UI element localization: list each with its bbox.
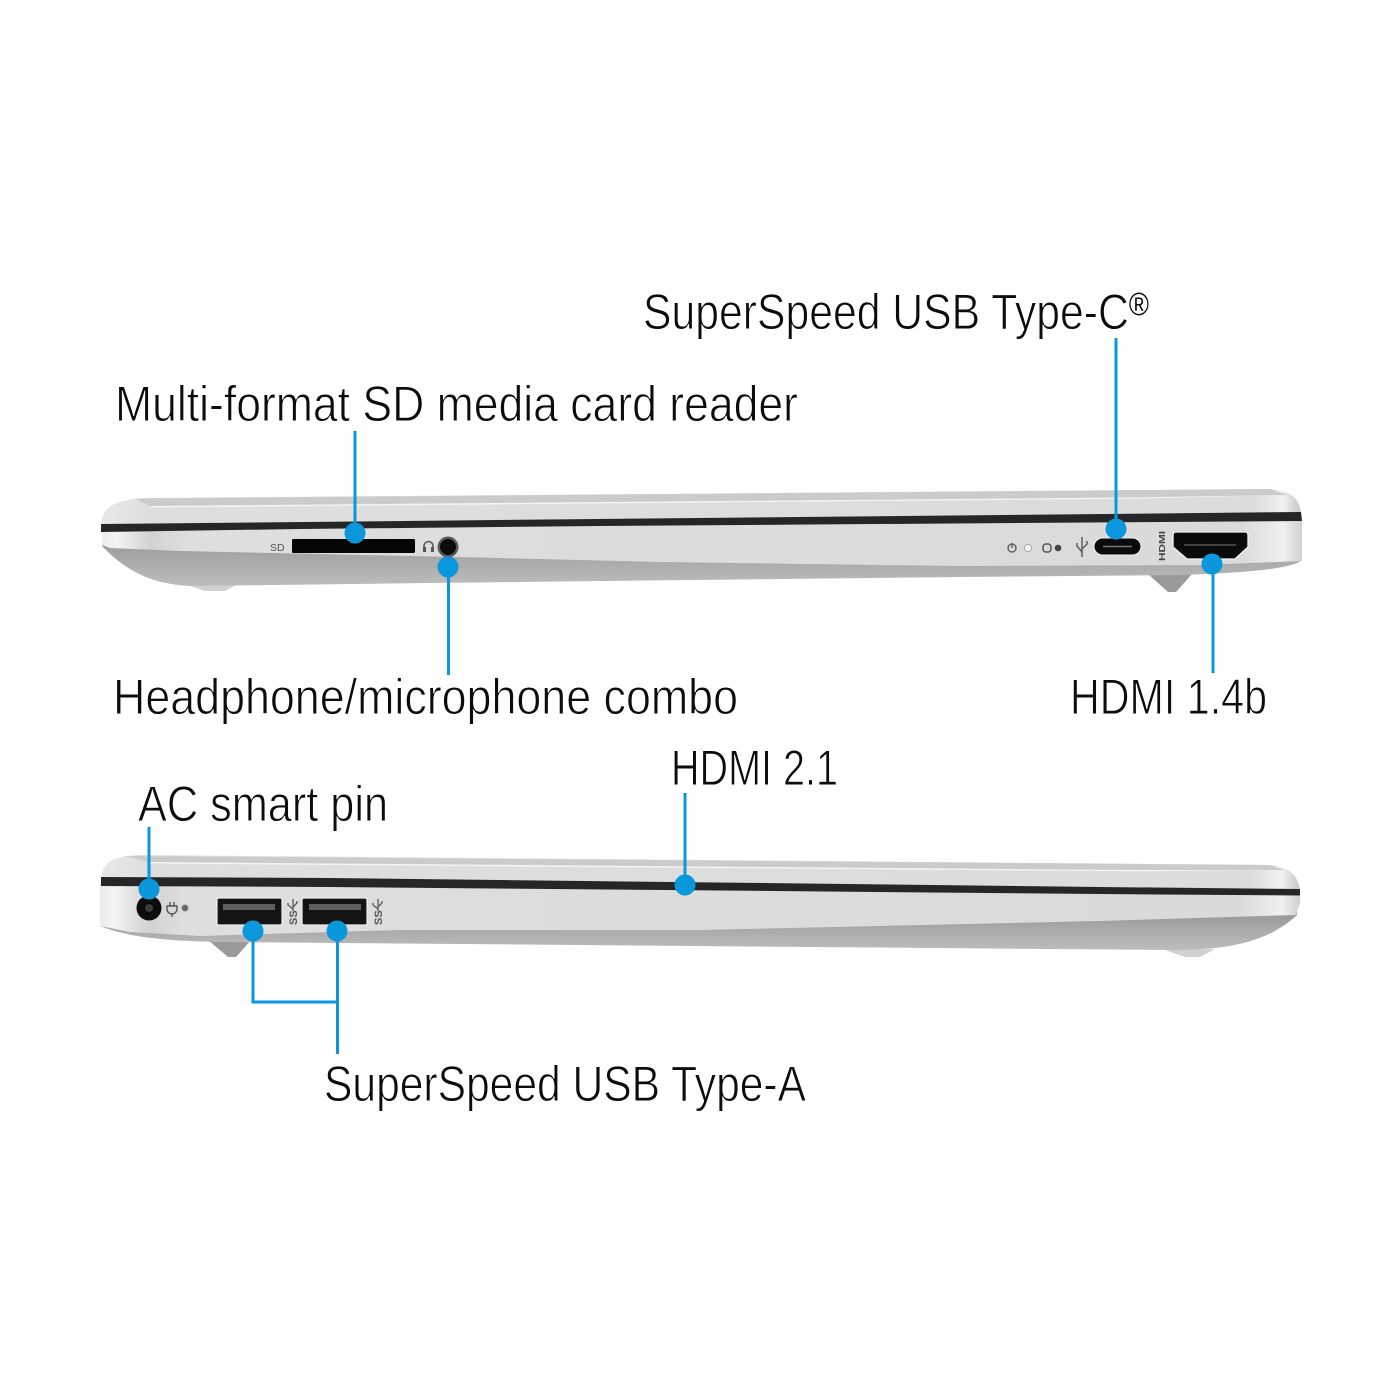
label: USB-C: SuperSpeed USB Type-C bbox=[643, 284, 1212, 340]
label: headphone: Headphone/microphone combo bbox=[113, 669, 738, 725]
base bbox=[100, 905, 1297, 950]
AC jack bbox=[136, 896, 162, 920]
label: AC pin: AC smart pin bbox=[138, 776, 388, 832]
base bbox=[102, 530, 1301, 586]
hinge band bbox=[101, 877, 1300, 896]
callout: HDMI 2.1 bbox=[674, 793, 696, 896]
SD label: SD bbox=[270, 542, 285, 554]
charge light bbox=[182, 904, 188, 912]
label: USB-C: ® bbox=[1129, 286, 1149, 322]
USB-A icon 1: SS bbox=[288, 910, 300, 925]
callout: headphone bbox=[438, 556, 458, 675]
icon: headphone bbox=[423, 542, 434, 552]
lid bbox=[101, 855, 1300, 892]
callout: HDMI 1.4b bbox=[1202, 554, 1222, 673]
callout: SD reader bbox=[344, 431, 366, 544]
laptop: left side view bbox=[100, 855, 1300, 957]
callout: AC pin bbox=[138, 827, 160, 900]
status icons bbox=[1008, 543, 1061, 552]
deck bbox=[102, 518, 1302, 566]
lid top stripe bbox=[135, 489, 1288, 506]
label: USB-A: SuperSpeed USB Type-A bbox=[324, 1056, 807, 1112]
USB-A icon 2: SS bbox=[373, 910, 385, 925]
deck bbox=[100, 884, 1300, 936]
USB-A icon 2 bbox=[373, 899, 385, 925]
label: HDMI 1.4b: HDMI 1.4b bbox=[1070, 669, 1267, 725]
lid top stripe bbox=[125, 856, 1285, 870]
foot right bbox=[1148, 574, 1192, 592]
laptop: right side view bbox=[101, 489, 1302, 592]
USB-A icon 1 bbox=[288, 899, 300, 925]
HDMI label: HDMI bbox=[1158, 531, 1167, 561]
foot right bbox=[1165, 949, 1215, 957]
hinge band bbox=[101, 512, 1302, 532]
HDMI port bbox=[1173, 532, 1248, 559]
foot left bbox=[185, 583, 240, 591]
USB-A port 1 bbox=[217, 898, 282, 925]
audio jack bbox=[438, 536, 458, 558]
label: SD reader: Multi-format SD media card reader bbox=[115, 376, 798, 432]
label: HDMI 2.1: HDMI 2.1 bbox=[671, 740, 838, 796]
icon: usb trident bbox=[1077, 537, 1087, 557]
USB-A port 2 bbox=[302, 898, 367, 925]
USB-C port bbox=[1094, 538, 1141, 555]
icon: power plug bbox=[167, 902, 177, 917]
foot left bbox=[208, 939, 252, 957]
lid bbox=[101, 489, 1301, 528]
SD slot bbox=[292, 539, 415, 553]
callout: USB-C bbox=[1106, 338, 1126, 540]
callout: USB-A bracket bbox=[242, 920, 348, 1054]
